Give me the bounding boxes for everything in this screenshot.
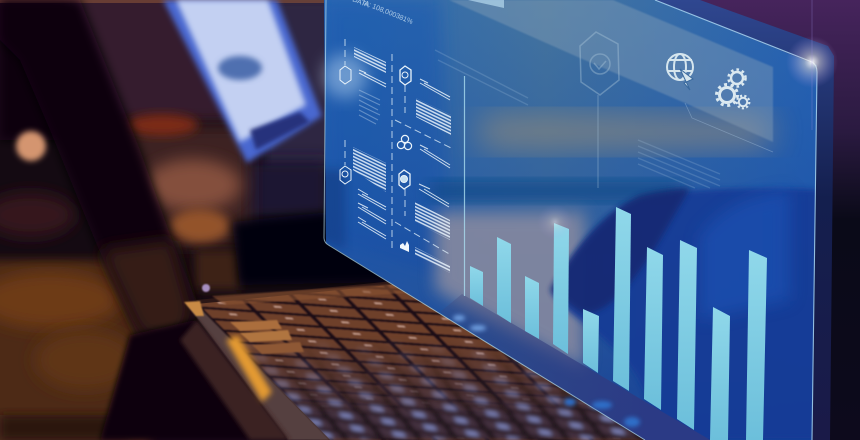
laptop keyboard [196,282,644,440]
icon: large faint hexagon check [580,32,619,188]
icon: small header tab [468,0,504,8]
black shadow behind keyboard [232,212,400,285]
faint text lines in panel [435,50,720,188]
data readout text: IA: 108,000381% [361,0,414,26]
icon: cluster of gears [397,135,412,150]
panel tint: blue band [430,182,680,200]
dark laptop lid [0,0,198,340]
panel bottom strip [440,294,712,440]
label lines [358,70,450,239]
glow behind hexagon [323,54,367,98]
outer panel frame [655,0,834,440]
striped text blocks [353,47,451,273]
lit keys [230,320,282,331]
blue keyboard reflections [453,315,640,427]
right backdrop [700,0,860,440]
panel edge lines [324,0,645,440]
hexagon badges [340,66,411,189]
top keyboard strip [212,284,420,305]
black shadow under laptop [100,320,310,440]
icon: globe with cursor [667,54,693,90]
chart axis [464,76,466,296]
hand silhouette [552,188,830,440]
bar light flare [537,204,573,240]
bar chart [464,76,767,440]
left column: dashboard widgets [323,39,451,273]
small list lines [359,90,380,124]
icon: small bar chart [400,241,409,252]
blurred second laptop screen [163,0,322,163]
bars [470,207,767,440]
panel: holographic dashboard [318,0,830,440]
panel tint: grey lower area [435,212,585,370]
laptop chassis edge with orange highlight [180,284,330,440]
panel tint: left deep blue [326,0,446,262]
dashed connector lines [345,39,451,255]
orange bokeh light [16,131,46,161]
icon: gears [716,70,749,108]
lens flare at panel corner [786,0,838,130]
header band [449,0,773,152]
panel tint: warm band [480,118,770,146]
